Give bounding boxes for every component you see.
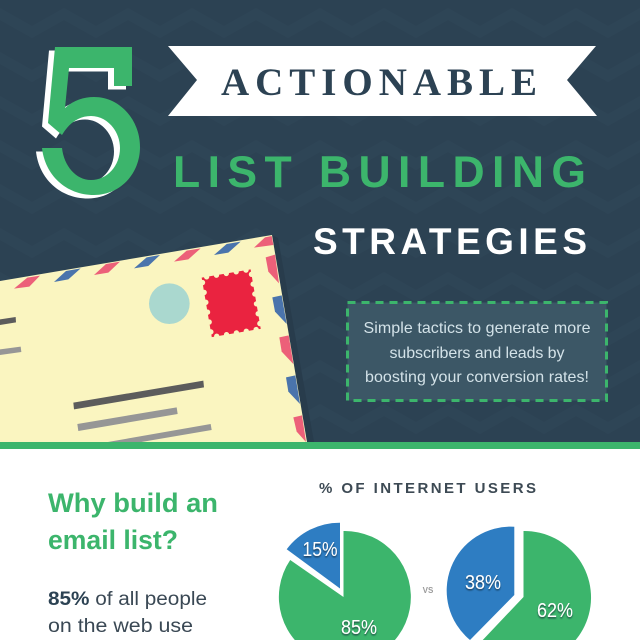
heading: Why build an email list — [48, 488, 218, 555]
chart heading: percent of internet users: % OF INTERNET USERS — [319, 480, 536, 497]
panel: dark hero background — [0, 0, 640, 445]
icon: large numeral 5 — [36, 47, 140, 198]
address lines — [0, 317, 212, 443]
pie chart: 62 vs 38: 62% — [537, 600, 573, 622]
icon: airmail envelope — [0, 235, 314, 443]
heading: Why build an email list: email list? — [48, 525, 178, 555]
pie chart: 85 vs 15 — [279, 523, 411, 640]
callout: dashed tagline box: Simple tactics to generate more — [364, 320, 591, 337]
postage stamp — [199, 266, 264, 340]
callout: dashed tagline box: boosting your conversion rates! — [365, 369, 589, 386]
pie chart: 62 vs 38 — [447, 527, 591, 640]
divider: green stripe — [0, 442, 640, 449]
pie chart: 62 vs 38: 38% — [465, 572, 501, 594]
right edge airmail stripes — [266, 255, 306, 442]
text block: email usage statistic: 85% of all people — [48, 589, 207, 610]
postmark circle — [149, 283, 190, 324]
callout: dashed tagline box — [348, 302, 606, 400]
top edge airmail stripes — [14, 236, 273, 289]
pie chart: 85 vs 15: 15% — [302, 539, 338, 561]
text block: email usage statistic: on the web use — [48, 616, 193, 637]
pie chart: 85 vs 15: 85% — [341, 617, 377, 639]
text block: email usage statistic — [48, 589, 207, 637]
callout: dashed tagline box: subscribers and leads by — [390, 345, 564, 362]
label: versus: VS — [423, 586, 434, 595]
panel: white content area — [0, 449, 640, 640]
heading: Strategies: STRATEGIES — [313, 221, 587, 262]
heading: List Building: LIST BUILDING — [173, 148, 586, 197]
heading: Why build an email list: Why build an — [48, 488, 218, 518]
banner: Actionable ribbon — [168, 46, 597, 116]
banner: Actionable ribbon: ACTIONABLE — [221, 61, 537, 104]
